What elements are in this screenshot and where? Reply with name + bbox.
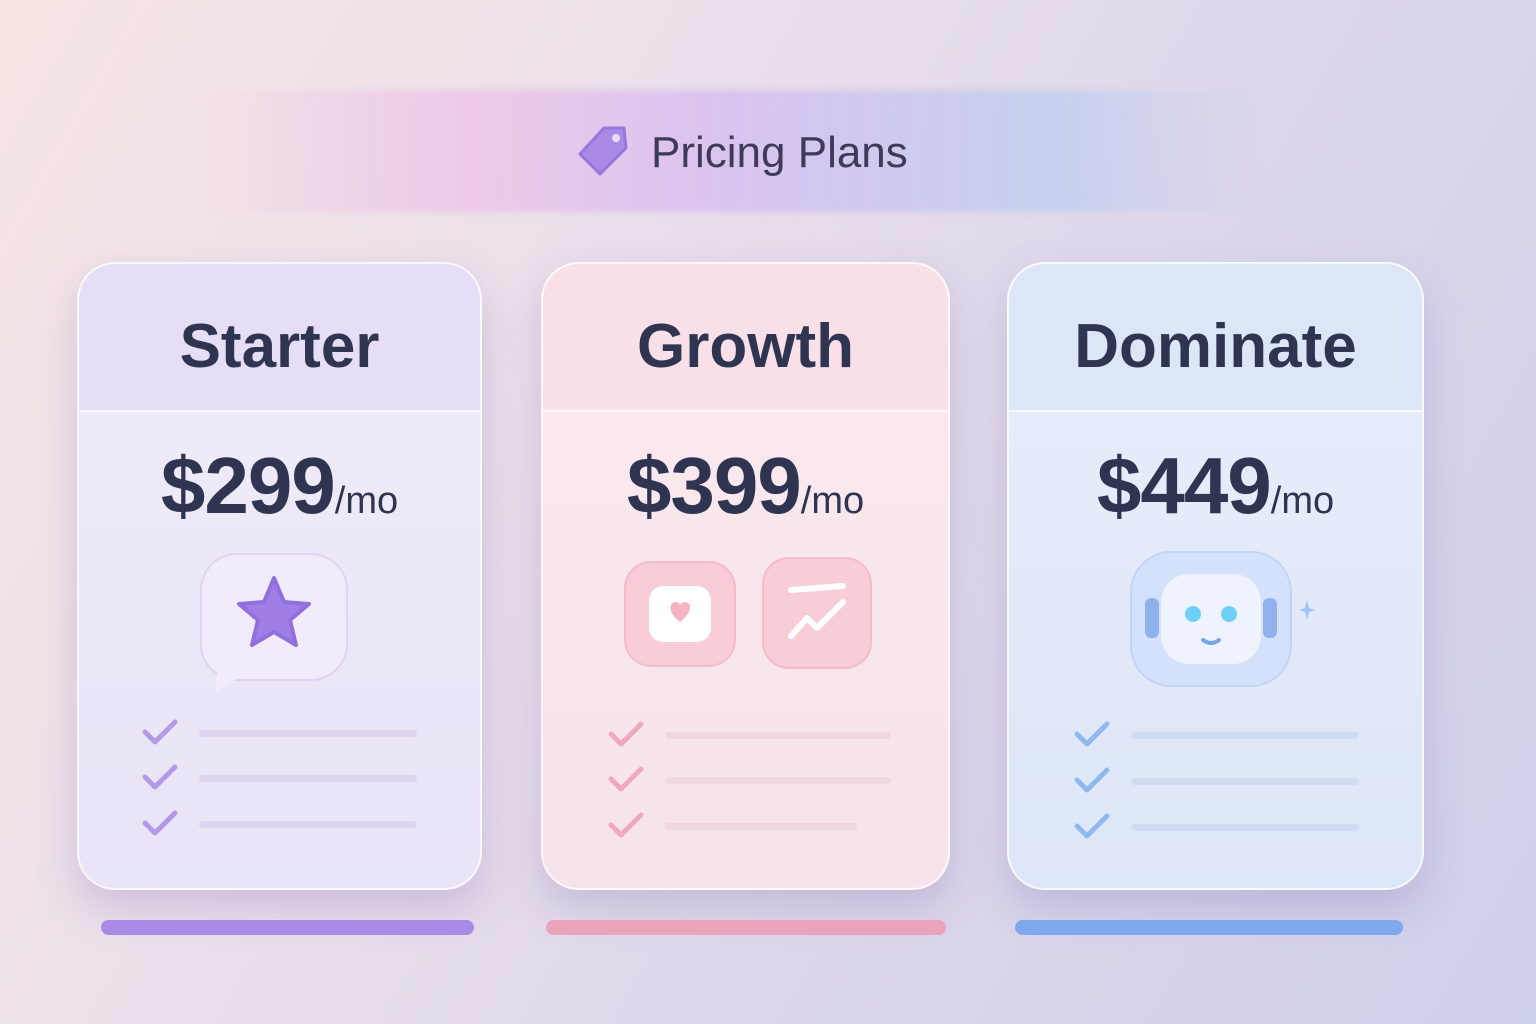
panel: Dominate [1007, 262, 1424, 890]
price: $449/mo: $449/mo [1097, 441, 1334, 530]
icon: price tag [578, 126, 628, 176]
feature list [142, 720, 417, 836]
price: $399/mo: $399/mo [627, 441, 864, 530]
heading: Growth: Growth [637, 312, 854, 380]
heading: Dominate: Dominate [1074, 312, 1357, 380]
heading: Growth [543, 264, 948, 412]
heading: Starter: Starter [180, 312, 379, 380]
icons: heart and chart [624, 557, 872, 669]
heading: Dominate [1009, 264, 1422, 412]
feature list [608, 722, 891, 838]
icon: robot [1130, 551, 1315, 687]
title text: Pricing Plans [651, 128, 908, 177]
accent bar: Growth [546, 920, 946, 935]
panel: Starter [77, 262, 482, 890]
accent bar: Starter [101, 920, 474, 935]
title banner [280, 88, 1202, 214]
price: $299/mo: $299/mo [161, 441, 398, 530]
accent bar: Dominate [1015, 920, 1403, 935]
feature list [1074, 722, 1359, 838]
icon: star chat bubble [200, 553, 348, 681]
heading: Starter [79, 264, 480, 412]
panel: Growth [541, 262, 950, 890]
